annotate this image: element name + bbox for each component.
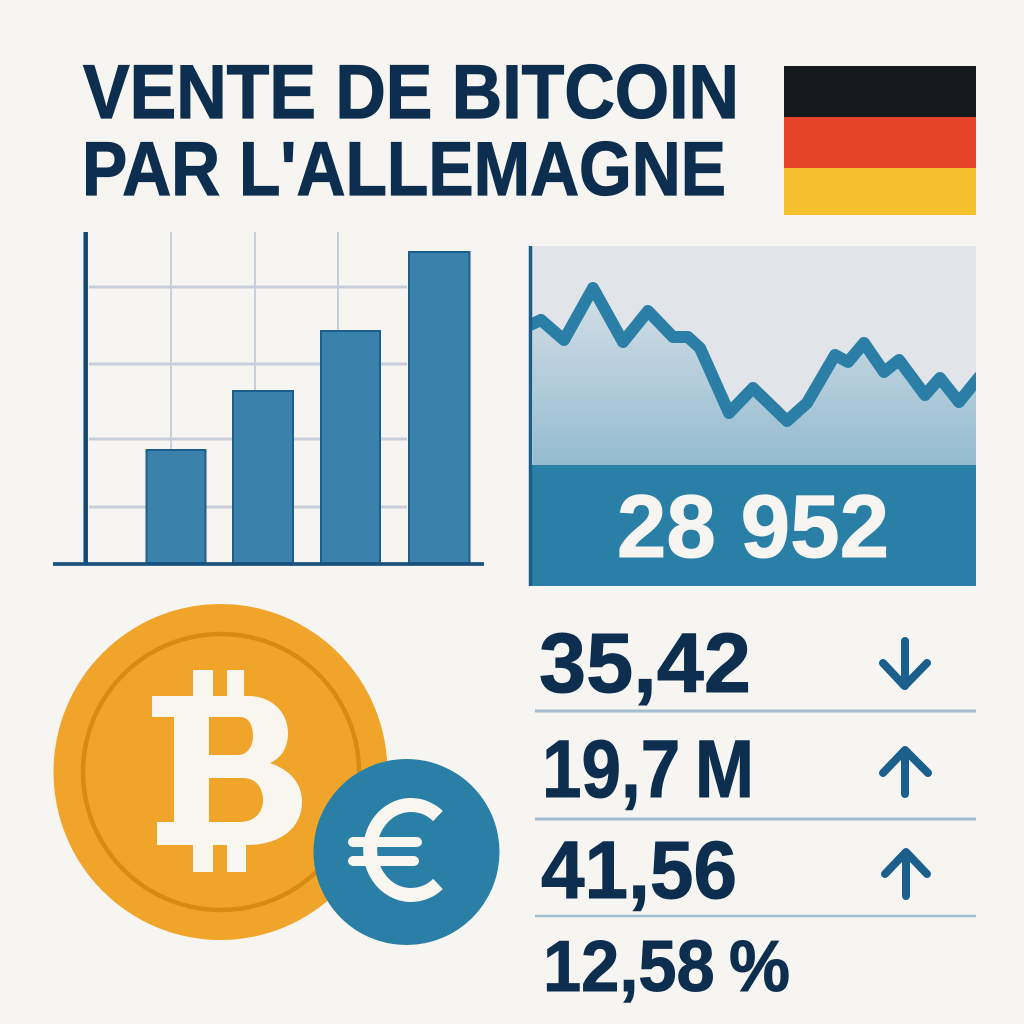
price line: [530, 288, 980, 421]
value band: 28 952: [617, 476, 889, 576]
value band: [529, 465, 976, 586]
icon: bitcoin coin: [54, 604, 388, 940]
title: VENTE DE BITCOIN: [83, 50, 739, 135]
bar chart: [53, 232, 484, 564]
stat: 12,58 %: 12,58 %: [543, 927, 790, 1007]
title: [82, 50, 739, 212]
icon: German flag: [784, 66, 976, 215]
stat: 19,7 M: [542, 724, 928, 815]
icon: euro coin: [314, 759, 500, 945]
stat: 35,42: 35,42: [539, 616, 751, 710]
area line chart panel: [529, 246, 980, 586]
stat rows: [535, 616, 976, 1007]
title: PAR L'ALLEMAGNE: [82, 127, 726, 212]
stat: 35,42: [539, 616, 927, 710]
stat: 41,56: 41,56: [541, 825, 737, 916]
stat: 19,7 M: 19,7 M: [542, 724, 754, 815]
stat: 41,56: [541, 825, 927, 916]
